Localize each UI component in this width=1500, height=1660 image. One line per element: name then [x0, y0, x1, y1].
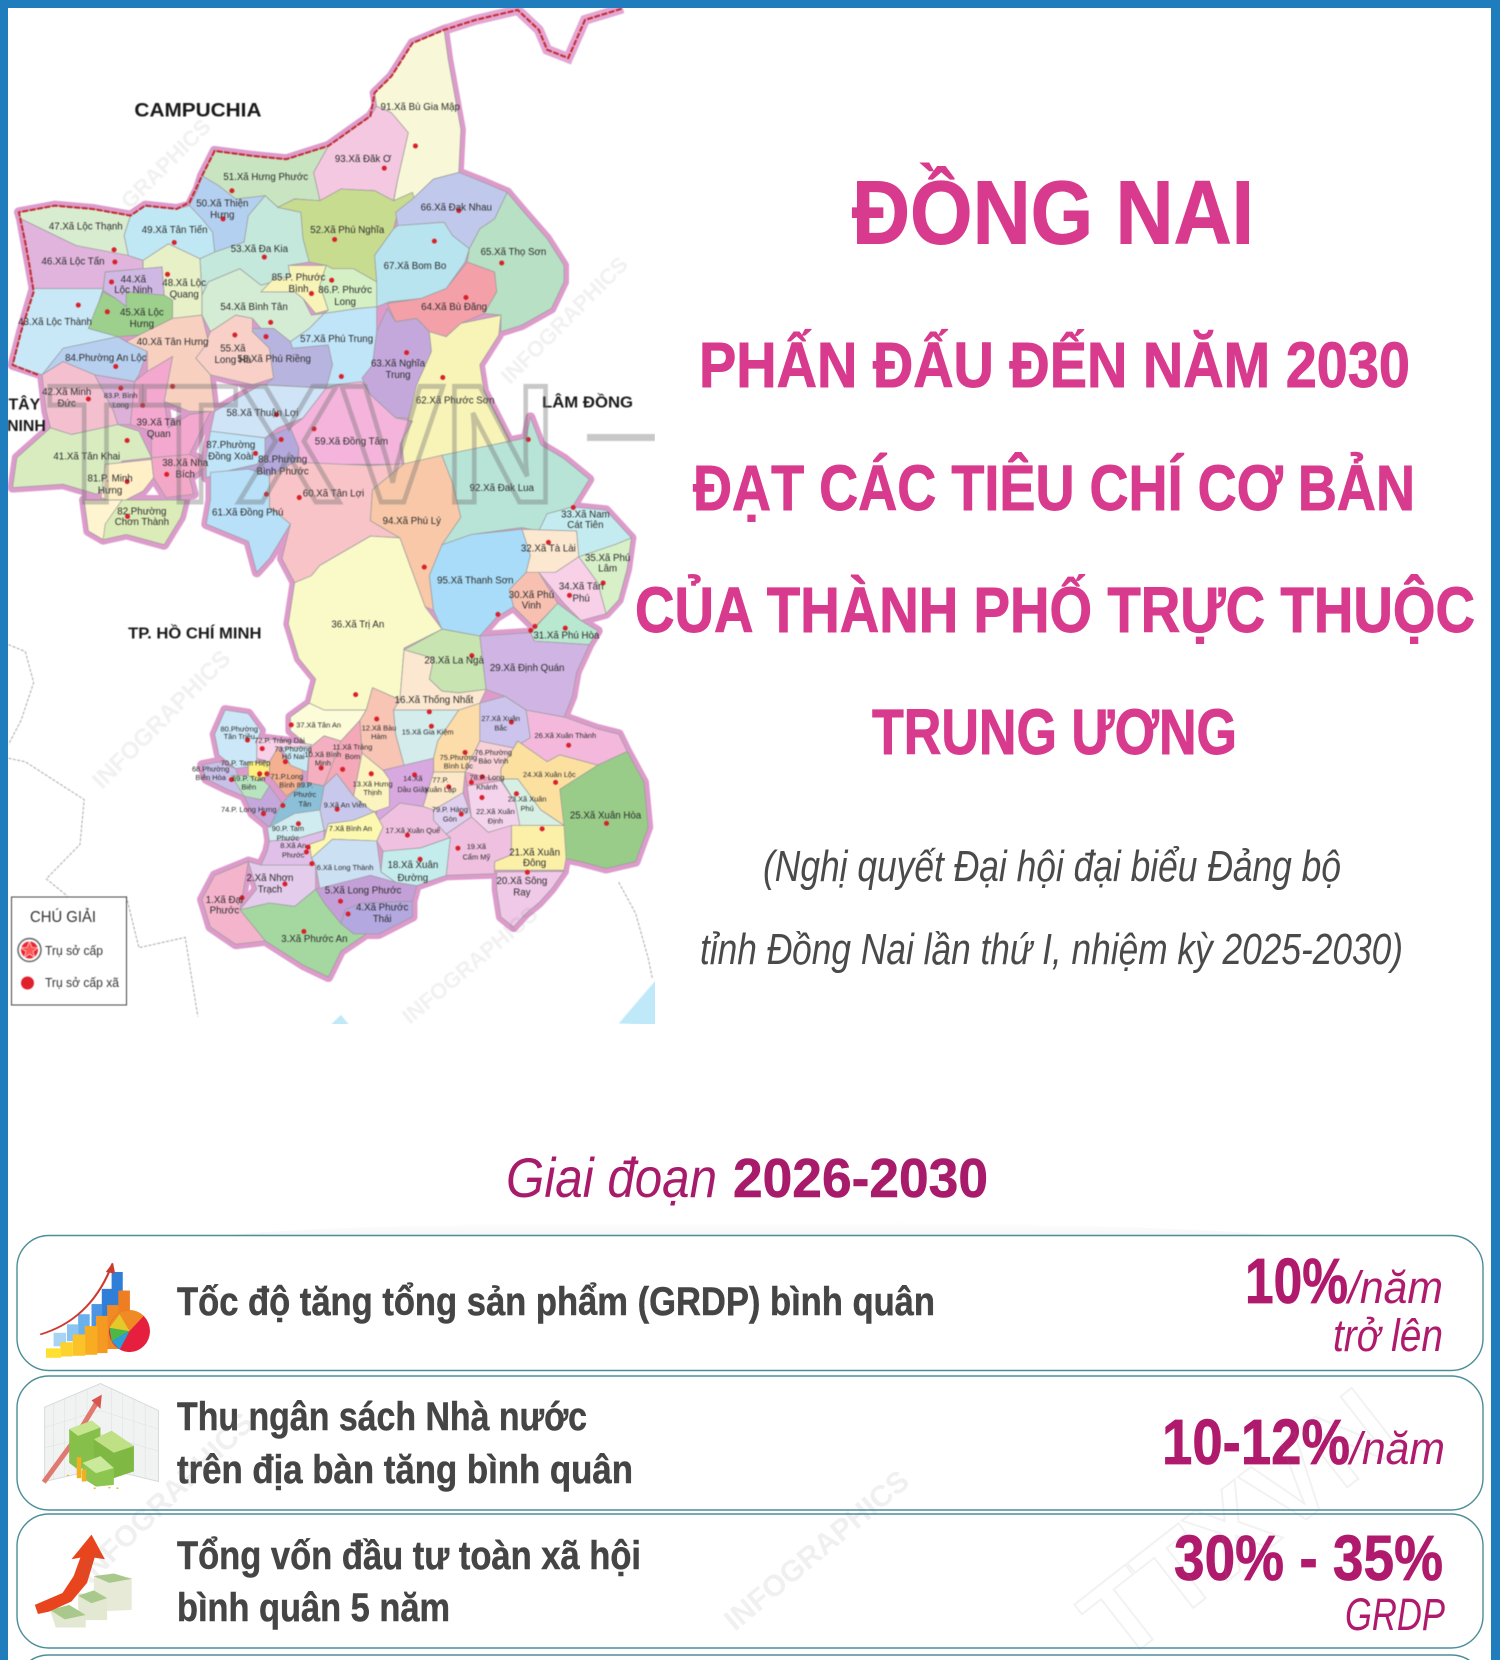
card 1 value: trở lên	[1333, 1310, 1443, 1361]
card watermarks	[72, 1365, 1419, 1660]
map commune labels: Hàm	[371, 732, 387, 741]
card 3 label	[177, 1534, 641, 1630]
map of Dong Nai communes	[7, 8, 660, 1029]
map commune labels: 51.Xã Hưng Phước	[223, 172, 308, 183]
map commune labels: 58.Xã Thuận Lợi	[226, 408, 299, 419]
neighbouring region names: TÂY	[8, 395, 41, 414]
map commune labels: Quang	[170, 289, 199, 300]
map commune labels: 47.Xã Lộc Thạnh	[49, 222, 123, 233]
map commune labels: Đồng Xoài	[208, 451, 253, 462]
card 3 value: GRDP	[1345, 1589, 1445, 1640]
map commune labels: 32.Xã Tà Lài	[521, 544, 576, 555]
map commune labels: 70.P. Tam Hiệp	[221, 758, 270, 767]
map commune labels: Bình Phước	[256, 466, 309, 477]
map watermarks: GRAPHICS	[116, 114, 216, 214]
map commune labels: 9.Xã An Viễn	[324, 801, 366, 810]
TTXVN watermark on map	[47, 383, 655, 505]
map commune labels: 41.Xã Tân Khai	[53, 451, 120, 462]
map commune labels	[18, 102, 642, 945]
map commune labels: 1.Xã Đại	[206, 895, 243, 906]
map commune labels: 59.Xã Đồng Tâm	[315, 437, 388, 448]
neighbouring region names: TP. HỒ CHÍ MINH	[128, 623, 261, 642]
map watermarks: INFOGRAPHICS	[496, 252, 633, 389]
map commune labels: 38.Xã Nha	[162, 458, 209, 469]
map commune labels: Phước	[282, 850, 305, 859]
map commune labels: Khánh	[476, 783, 498, 792]
map commune labels: 93.Xã Đăk Ơ	[335, 154, 392, 165]
map commune labels: Bình Lộc	[444, 762, 473, 771]
map commune labels: 64.Xã Bù Đăng	[421, 302, 487, 313]
map commune labels: 14.Xã	[403, 774, 423, 783]
map commune labels: 22.Xã Xuân	[476, 807, 515, 816]
card 1 value	[1245, 1245, 1443, 1361]
commune halo outline	[13, 30, 564, 504]
map commune labels: 24.Xã Xuân Lộc	[523, 770, 576, 779]
map commune labels: 13.Xã Hưng	[353, 780, 393, 789]
title line 4: TRUNG ƯƠNG	[872, 696, 1237, 768]
map commune labels: 5.Xã Long Phước	[325, 885, 402, 896]
map commune labels: Thái	[373, 914, 392, 925]
map commune labels: Bình	[279, 781, 295, 790]
map commune labels: 82.Phường	[117, 506, 166, 517]
map commune labels: 33.Xã Nam	[561, 510, 610, 521]
map commune labels: 83.P. Bình	[104, 391, 138, 400]
map commune labels: 57.Xã Phú Trung	[300, 334, 373, 345]
map commune labels: Biên	[241, 783, 256, 792]
neighbouring region names	[7, 99, 633, 642]
map commune labels: Dầu Giây	[397, 785, 429, 794]
northern communes	[13, 30, 564, 504]
map commune labels: 44.Xã	[121, 275, 147, 286]
map commune labels: 36.Xã Trị An	[331, 620, 384, 631]
map commune labels: Trung	[386, 370, 411, 381]
map commune labels: 63.Xã Nghĩa	[371, 358, 426, 369]
section heading: 2026-2030	[733, 1147, 988, 1209]
map commune labels: 31.Xã Phú Hòa	[533, 630, 600, 641]
map commune labels: 91.Xã Bù Gia Mập	[381, 102, 460, 113]
map commune labels: Thịnh	[363, 788, 382, 797]
card 3: total social investment	[17, 1514, 1483, 1648]
map commune labels: 78.P. Long	[470, 773, 504, 782]
section heading	[506, 1146, 988, 1209]
map commune labels: 77.P.	[432, 775, 449, 784]
map commune labels: 81.P. Minh	[87, 474, 133, 485]
map commune labels: Tân	[298, 800, 311, 809]
map commune labels: 88.Phường	[258, 455, 307, 466]
subtitle line 1: (Nghị quyết Đại hội đại biểu Đảng bộ	[763, 842, 1341, 891]
map commune labels: Hưng	[98, 485, 122, 496]
map legend: Trụ sở cấp xã	[45, 975, 120, 990]
card 4 top edge	[17, 1655, 1483, 1660]
map commune labels: 6.Xã Long Thành	[317, 863, 373, 872]
map commune labels: 89.P.	[297, 781, 313, 790]
map commune labels: 50.Xã Thiện	[196, 198, 248, 209]
map commune labels: 74.P. Long Hưng	[221, 805, 277, 814]
map commune labels: 65.Xã Thọ Sơn	[481, 247, 546, 258]
map legend	[12, 897, 126, 1005]
southern communes	[84, 417, 648, 977]
map commune labels: 87.Phường	[206, 440, 255, 451]
title block	[635, 162, 1475, 974]
neighbouring region names: CAMPUCHIA	[134, 99, 261, 121]
map commune labels: Biên Hòa	[195, 773, 227, 782]
map commune labels: 19.Xã	[467, 842, 487, 851]
map commune labels: 53.Xã Đa Kia	[231, 244, 289, 255]
map commune labels: 2.Xã Nhơn	[246, 873, 293, 884]
map commune labels: Định	[488, 817, 503, 826]
map commune labels: 58.Xã Phú Riềng	[237, 354, 311, 365]
map commune labels: Xuân Lập	[425, 785, 456, 794]
international border	[13, 8, 623, 375]
map commune labels: 17.Xã Xuân Quế	[385, 826, 441, 835]
map commune labels: Hưng	[130, 319, 154, 330]
map commune labels: 27.Xã Xuân	[481, 714, 520, 723]
map commune labels: Minh	[315, 758, 331, 767]
map commune labels: Bình	[289, 284, 309, 295]
commune seat dots	[78, 146, 607, 932]
map commune labels: 68.Phường	[192, 765, 229, 774]
map commune labels: 15.Xã Gia Kiệm	[402, 728, 454, 737]
icon: bar chart with pie	[40, 1262, 150, 1358]
shadow above first card	[210, 1222, 1290, 1258]
map commune labels: 95.Xã Thanh Sơn	[437, 575, 514, 586]
map commune labels: 46.Xã Lộc Tấn	[42, 257, 105, 268]
map commune labels: 45.Xã Lộc	[120, 307, 164, 318]
card 2 value: /năm	[1347, 1423, 1445, 1474]
map commune labels: 40.Xã Tân Hưng	[137, 337, 208, 348]
map commune labels: 75.Phường	[440, 753, 477, 762]
map commune labels: 85.P. Phước	[272, 273, 326, 284]
card 2: state budget revenue	[17, 1376, 1483, 1510]
map commune labels: 18.Xã Xuân	[387, 860, 438, 871]
map commune labels: 23.Xã Xuân	[508, 794, 547, 803]
map commune labels: 86.P. Phước	[318, 285, 372, 296]
map commune labels: 21.Xã Xuân	[509, 847, 560, 858]
card 1: GRDP growth	[17, 1236, 1483, 1370]
map commune labels: 71.P.Long	[270, 772, 303, 781]
map commune labels: 90.P. Tam	[272, 824, 304, 833]
neighbouring region names: LÂM ĐỒNG	[542, 393, 633, 412]
card 3 label: Tổng vốn đầu tư toàn xã hội	[177, 1534, 641, 1578]
card 1 label: Tốc độ tăng tổng sản phẩm (GRDP) bình quân	[177, 1280, 935, 1324]
map commune labels: Phước	[294, 790, 316, 799]
card 1 value: /năm	[1345, 1262, 1443, 1313]
map commune labels: 52.Xã Phú Nghĩa	[310, 225, 385, 236]
map commune labels: 20.Xã Sông	[496, 876, 547, 887]
card 2 label: Thu ngân sách Nhà nước	[177, 1395, 587, 1439]
map commune labels: Tân Triều	[224, 732, 255, 741]
map commune labels: 8.Xã An	[280, 841, 306, 850]
commune polygons	[13, 30, 648, 977]
map commune labels: Bảo Vinh	[478, 756, 508, 765]
card 3 value: 30% - 35%	[1174, 1522, 1443, 1594]
map legend: CHÚ GIẢI	[30, 907, 96, 926]
map commune labels: Đông	[523, 858, 546, 869]
map legend: Trụ sở cấp	[45, 943, 103, 958]
map commune labels: Lộc Ninh	[114, 285, 153, 296]
northern border strip	[444, 8, 623, 58]
map commune labels: 76.Phường	[475, 748, 512, 757]
map commune labels: 67.Xã Bom Bo	[384, 261, 446, 272]
title line 1: PHẤN ĐẤU ĐẾN NĂM 2030	[699, 329, 1410, 401]
map commune labels: 28.Xã La Ngà	[424, 656, 484, 667]
title: province name: ĐỒNG NAI	[852, 162, 1254, 264]
map commune labels: Phước	[277, 834, 300, 843]
map commune labels: 61.Xã Đồng Phú	[212, 508, 283, 519]
icon: red arrow with banknotes	[35, 1535, 132, 1628]
map commune labels: Gòn	[443, 814, 457, 823]
map watermarks	[87, 114, 633, 1029]
map commune labels: 92.Xã Đak Lua	[470, 483, 535, 494]
icon: money stacks on chart	[44, 1384, 158, 1488]
map commune labels: 62.Xã Phước Sơn	[416, 395, 495, 406]
map commune labels: 11.Xã Trảng	[333, 742, 372, 751]
map commune labels: Trạch	[258, 884, 282, 895]
map commune labels: 79.P. Hàng	[432, 805, 468, 814]
map commune labels: 55.Xã	[220, 343, 246, 354]
map commune labels: 30.Xã Phú	[509, 590, 554, 601]
map commune labels: 37.Xã Tân An	[296, 720, 341, 729]
map commune labels: Bích	[176, 469, 195, 480]
section heading: Giai đoạn	[506, 1146, 717, 1209]
map commune labels: 94.Xã Phú Lý	[383, 516, 441, 527]
card 2 value: 10-12%	[1162, 1406, 1350, 1478]
map commune labels: 60.Xã Tân Lợi	[303, 488, 364, 499]
map commune labels: Lâm	[598, 564, 617, 575]
map commune labels: 10.Xã Bình	[305, 750, 341, 759]
TTXVN watermark on map: TTXVN	[48, 350, 556, 538]
card watermarks: INFOGRAPHICS	[72, 1407, 260, 1590]
commune halo outline south	[84, 417, 648, 977]
map commune labels: 43.Xã Lộc Thành	[18, 317, 92, 328]
map watermarks: INFOGRAPHICS	[87, 645, 236, 794]
map commune labels: Đức	[57, 399, 76, 410]
card 2 label: trên địa bàn tăng bình quân	[177, 1448, 633, 1492]
map commune labels: 54.Xã Bình Tân	[220, 302, 288, 313]
map commune labels: 72.P. Trảng Dài	[254, 736, 305, 745]
map commune labels: 49.Xã Tân Tiến	[142, 225, 208, 236]
card watermarks: INFOGRAPHICS	[718, 1464, 916, 1637]
map commune labels: Đường	[397, 873, 428, 884]
map commune labels: Bắc	[494, 723, 507, 732]
map commune labels: Cát Tiên	[567, 520, 604, 531]
map commune labels: 34.Xã Tân	[559, 582, 604, 593]
map commune labels: 84.Phường An Lộc	[65, 353, 147, 364]
neighbouring province boundaries	[8, 645, 652, 1017]
map commune labels: 26.Xã Xuân Thành	[534, 731, 596, 740]
map commune labels: Phước	[210, 906, 239, 917]
map commune labels: Phú	[521, 804, 534, 813]
map watermarks: INFOGRAPHICS	[397, 901, 542, 1029]
map commune labels: 42.Xã Minh	[42, 387, 91, 398]
map commune labels: Long	[334, 297, 356, 308]
map commune labels: 69.P. Trần	[232, 774, 265, 783]
map commune labels: Vinh	[522, 601, 541, 612]
map commune labels: 25.Xã Xuân Hòa	[570, 810, 642, 821]
card 2 label	[177, 1395, 633, 1492]
map commune labels: Hố Nai	[282, 752, 305, 761]
map commune labels: Chơn Thành	[115, 517, 169, 528]
map commune labels: 12.Xã Bàu	[362, 723, 396, 732]
map commune labels: 3.Xã Phước An	[281, 934, 348, 945]
map commune labels: 7.Xã Bình An	[329, 824, 372, 833]
map commune labels: Phú	[573, 593, 590, 604]
card 1 value: 10%	[1245, 1245, 1348, 1317]
map commune labels: Cẩm Mỹ	[463, 853, 490, 862]
map commune labels: Long Hà	[215, 355, 252, 366]
map commune labels: 4.Xã Phước	[356, 902, 408, 913]
map commune labels: 16.Xã Thống Nhất	[395, 695, 474, 706]
map commune labels: 39.Xã Tân	[136, 418, 181, 429]
card 3 label: bình quân 5 năm	[177, 1586, 450, 1630]
map commune labels: 73.Phường	[275, 745, 312, 754]
map commune labels: Hưng	[210, 210, 234, 221]
neighbouring region names: NINH	[7, 418, 46, 435]
card 3 value	[1174, 1522, 1445, 1640]
map commune labels: Ray	[513, 888, 531, 899]
map commune labels: Long	[112, 401, 129, 410]
map commune labels: 80.Phường	[221, 724, 258, 733]
map commune labels: 29.Xã Định Quán	[490, 663, 564, 674]
sea and water	[331, 980, 655, 1024]
map commune labels: Quan	[147, 429, 171, 440]
map commune labels: 48.Xã Lộc	[162, 278, 206, 289]
map commune labels: Bom	[345, 752, 360, 761]
map commune labels: 66.Xã Đak Nhau	[421, 203, 492, 214]
map commune labels: 35.Xã Phú	[585, 553, 630, 564]
